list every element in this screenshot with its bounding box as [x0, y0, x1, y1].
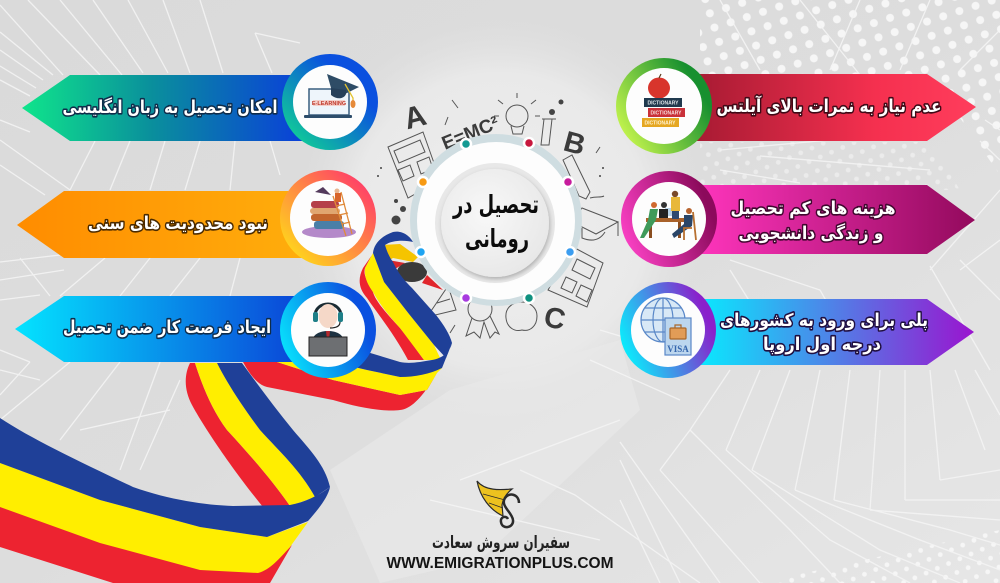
icon: golden bird — [477, 481, 519, 527]
label: امکان تحصیل به زبان انگلیسی — [62, 97, 278, 118]
ribbon lower loop strand — [243, 343, 452, 411]
centre badge — [410, 134, 582, 306]
romanian flag ribbon — [0, 232, 452, 583]
icon: dictionaries and apple: DICTIONARY — [645, 120, 676, 126]
label: درجه اول اروپا — [763, 335, 881, 355]
logo — [386, 481, 614, 572]
icon: dictionaries and apple: DICTIONARY — [648, 100, 679, 106]
formula E=MC2: E=MC² — [439, 113, 502, 155]
website: WWW.EMIGRATIONPLUS.COM — [386, 555, 614, 572]
icon: dictionaries and apple — [642, 74, 685, 127]
centre title: رومانی — [465, 224, 529, 254]
label: پلی برای ورود به کشورهای — [720, 311, 928, 331]
icon: e-learning laptop: E-LEARNING — [312, 101, 346, 107]
ribbon loop strand — [360, 232, 452, 360]
badge ring — [616, 58, 712, 154]
badge ring — [621, 171, 717, 267]
ribbon middle strand — [186, 363, 330, 507]
ring dots — [416, 138, 575, 303]
badge ring — [282, 54, 378, 150]
badge ring — [280, 170, 376, 266]
label — [730, 199, 896, 244]
icon: globe and visa: VISA — [667, 344, 689, 354]
label — [720, 311, 928, 355]
company name: سفیران سروش سعادت — [432, 533, 570, 553]
icon: e-learning laptop — [304, 74, 359, 118]
label: هزینه های کم تحصیل — [730, 199, 896, 219]
icon: dictionaries and apple: DICTIONARY — [651, 110, 682, 116]
panel: right banner 3 — [620, 282, 974, 378]
ink dots — [377, 100, 604, 224]
letter C: C — [541, 301, 568, 337]
line art — [388, 93, 618, 338]
panel: left banner 3 — [15, 282, 376, 378]
letter B: B — [560, 126, 589, 162]
white disc — [417, 142, 575, 300]
badge ring — [280, 282, 376, 378]
loop interior — [382, 244, 443, 290]
label: ایجاد فرصت کار ضمن تحصیل — [63, 318, 271, 338]
icon: support agent — [309, 304, 347, 356]
badge ring — [620, 282, 716, 378]
label: و زندگی دانشجویی — [738, 223, 884, 244]
panel: right banner 1 — [616, 58, 976, 154]
ribbon main band — [0, 418, 330, 583]
icon: globe and visa — [641, 298, 691, 355]
label: عدم نیاز به نمرات بالای آیلتس — [716, 94, 942, 117]
inner disc — [435, 163, 555, 283]
doodle icons around centre — [377, 93, 618, 338]
panel: left banner 1 — [22, 54, 378, 150]
letter A: A — [400, 99, 430, 136]
label: نبود محدودیت های سنی — [88, 214, 268, 234]
panel: left banner 2 — [17, 170, 376, 266]
outer ring — [410, 134, 582, 306]
icon: students at table — [640, 191, 696, 240]
icon: books and ladder — [302, 187, 356, 238]
centre title: تحصیل در — [452, 190, 539, 219]
centre title — [452, 190, 539, 254]
panel: right banner 2 — [621, 171, 975, 267]
